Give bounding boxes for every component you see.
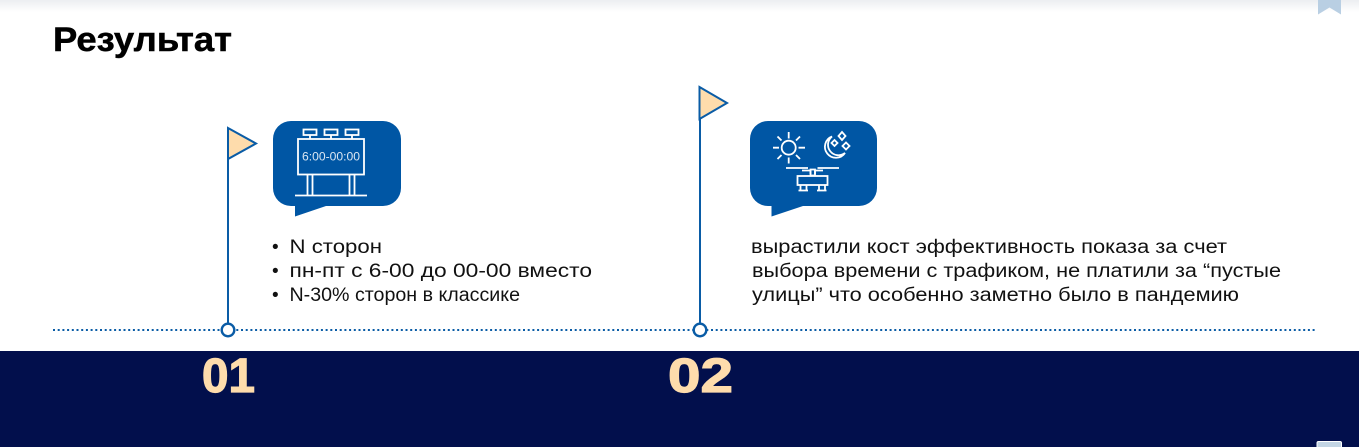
step 1 bullet list xyxy=(272,237,592,306)
icon: bookmark top xyxy=(1318,0,1341,14)
title: Результат xyxy=(53,21,232,59)
timeline dotted line xyxy=(53,329,1316,331)
step 1 icon: billboard speech bubble: 6:00-00:00 xyxy=(302,150,360,164)
step 2 icon: day and night traffic speech bubble xyxy=(750,121,877,216)
step 1 bullet list: • xyxy=(272,285,279,306)
step 2 description xyxy=(751,237,1281,306)
step 1 bullet list: • xyxy=(272,237,279,258)
step 1 bullet list: • xyxy=(272,261,279,282)
step 1 bullet list: пн-пт с 6-00 до 00-00 вместо xyxy=(290,261,592,282)
step 1 icon: billboard speech bubble xyxy=(273,121,401,216)
step 1 bullet list: N сторон xyxy=(290,237,382,258)
step 1 flag marker xyxy=(222,128,256,336)
step 2 description: улицы” что особенно заметно было в пандемию xyxy=(752,285,1239,306)
step 2 number: 02 xyxy=(668,350,733,403)
icon: bottom tab xyxy=(1317,442,1342,447)
bottom band xyxy=(0,351,1359,447)
step 2 flag marker xyxy=(694,87,727,336)
step 2 description: выбора времени с трафиком, не платили за “пустые xyxy=(752,261,1281,282)
step 1 bullet list: N-30% сторон в классике xyxy=(290,285,520,306)
step 1 number: 01 xyxy=(202,350,255,403)
step 2 description: вырастили кост эффективность показа за счет xyxy=(751,237,1227,258)
